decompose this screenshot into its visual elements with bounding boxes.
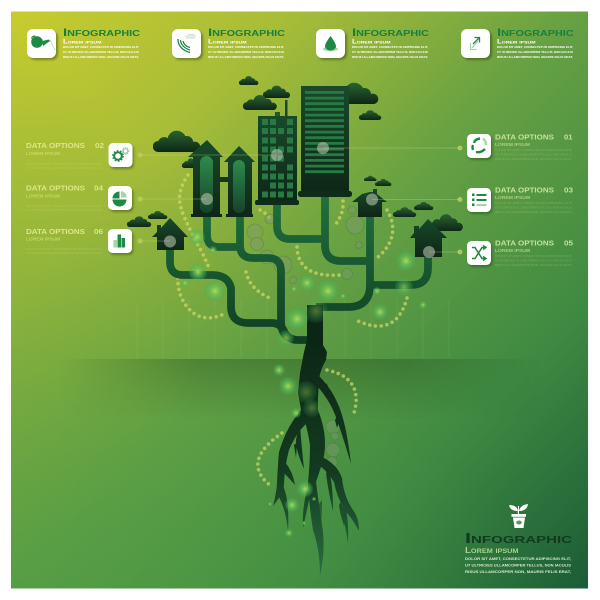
icon: shuffle arrows bbox=[472, 246, 486, 260]
data option 02: DOLOR SIT AMET, CONSECTETUR ADIPISCING ELIT, bbox=[26, 162, 102, 166]
body text: DOLOR SIT AMET, CONSECTETUR ADIPISCING ELIT, bbox=[208, 45, 284, 49]
body text: DOLOR SIT AMET, CONSECTETUR ADIPISCING ELIT, bbox=[352, 45, 428, 49]
data option 02: DATA OPTIONS bbox=[26, 141, 85, 150]
icon: recycle bbox=[472, 138, 486, 152]
data option 06: LOREM IPSUM bbox=[26, 236, 61, 242]
dotted circle arcs bbox=[178, 175, 407, 486]
body text: RISUS ULLAMCORPER NON, MAURIS FELIS ERAT, bbox=[497, 55, 573, 59]
data option 04: UT ULTRICIES ULLAMCORPER TELLUS, NON IACULIS bbox=[26, 208, 102, 212]
heading: Infographic bbox=[208, 27, 285, 39]
top block 3: water drop bbox=[316, 27, 429, 60]
body text: UT ULTRICIES ULLAMCORPER TELLUS, NON IACULIS bbox=[352, 50, 428, 54]
body text: UT ULTRICIES ULLAMCORPER TELLUS, NON IACULIS bbox=[63, 50, 139, 54]
body text: RISUS ULLAMCORPER NON, MAURIS FELIS ERAT, bbox=[352, 55, 428, 59]
top block 4: arrows bbox=[461, 27, 574, 60]
icon: pie chart bbox=[112, 191, 127, 207]
data option 02: LOREM IPSUM bbox=[26, 151, 61, 156]
body text: RISUS ULLAMCORPER NON, MAURIS FELIS ERAT, bbox=[465, 569, 571, 574]
data option 03: DOLOR SIT AMET, CONSECTETUR ADIPISCING ELIT, bbox=[495, 201, 572, 205]
icon: diagonal arrows bbox=[470, 38, 480, 50]
window building bbox=[255, 100, 299, 205]
body text: UT ULTRICIES ULLAMCORPER TELLUS, NON IACULIS bbox=[208, 50, 284, 54]
tower with arrow roof A bbox=[188, 140, 223, 217]
house left bbox=[152, 218, 188, 250]
body text: UT ULTRICIES ULLAMCORPER TELLUS, NON IACULIS bbox=[465, 562, 571, 568]
data option 05 bbox=[467, 238, 573, 267]
data option 04: DOLOR SIT AMET, CONSECTETUR ADIPISCING ELIT, bbox=[26, 204, 102, 208]
house right lower bbox=[410, 219, 447, 257]
heading: Infographic bbox=[63, 27, 140, 39]
data option 03: DATA OPTIONS bbox=[495, 186, 554, 194]
data option 06: DOLOR SIT AMET, CONSECTETUR ADIPISCING ELIT, bbox=[26, 247, 102, 251]
data option 02: 02 bbox=[95, 141, 104, 150]
icon: list bbox=[472, 194, 486, 206]
icon: potted plant bbox=[509, 504, 528, 528]
data option 06: DATA OPTIONS bbox=[26, 227, 85, 236]
clouds bbox=[127, 76, 463, 231]
data option 03: RISUS ULLAMCORPER NON, MAURIS FELIS ERAT, bbox=[495, 210, 572, 214]
data option 01 bbox=[467, 132, 572, 161]
icon: watering can bbox=[31, 36, 55, 50]
data option 03 bbox=[467, 186, 573, 214]
body text: RISUS ULLAMCORPER NON, MAURIS FELIS ERAT, bbox=[208, 55, 284, 59]
ground band bbox=[90, 300, 498, 404]
house right upper bbox=[352, 189, 387, 217]
heading: Infographic bbox=[497, 27, 574, 39]
striped office building bbox=[298, 86, 352, 197]
tree pipes bbox=[170, 195, 428, 340]
data option 01: UT ULTRICIES ULLAMCORPER TELLUS, NON IACULIS bbox=[495, 152, 572, 156]
leader lines and nodes bbox=[138, 142, 462, 258]
data option 04: 04 bbox=[94, 184, 104, 192]
subheading: Lorem ipsum bbox=[63, 40, 102, 46]
subheading: Lorem ipsum bbox=[497, 40, 536, 46]
data option 01: RISUS ULLAMCORPER NON, MAURIS FELIS ERAT, bbox=[495, 157, 572, 161]
body text: DOLOR SIT AMET, CONSECTETUR ADIPISCING ELIT, bbox=[63, 45, 139, 49]
tree roots bbox=[273, 305, 359, 576]
data option 06: UT ULTRICIES ULLAMCORPER TELLUS, NON IACULIS bbox=[26, 251, 102, 255]
translucent bubbles bbox=[247, 206, 364, 468]
top block 1: watering can bbox=[27, 27, 140, 60]
data option 03: 03 bbox=[564, 186, 573, 194]
data option 04: LOREM IPSUM bbox=[26, 194, 61, 198]
subheading: Lorem ipsum bbox=[465, 546, 518, 555]
data option 01: DATA OPTIONS bbox=[495, 132, 554, 142]
data option 05: RISUS ULLAMCORPER NON, MAURIS FELIS ERAT, bbox=[495, 263, 572, 267]
data option 02 bbox=[26, 141, 134, 170]
data option 06 bbox=[26, 227, 134, 255]
subheading: Lorem ipsum bbox=[208, 40, 247, 46]
data option 04 bbox=[26, 184, 134, 212]
data option 06: 06 bbox=[94, 227, 103, 236]
heading: Infographic bbox=[465, 531, 572, 547]
body text: UT ULTRICIES ULLAMCORPER TELLUS, NON IACULIS bbox=[497, 50, 573, 54]
data option 01: DOLOR SIT AMET, CONSECTETUR ADIPISCING ELIT, bbox=[495, 148, 572, 152]
body text: DOLOR SIT AMET, CONSECTETUR ADIPISCING ELIT, bbox=[465, 556, 571, 561]
data option 04: DATA OPTIONS bbox=[26, 184, 85, 192]
icon: signal arcs bbox=[178, 34, 196, 52]
heading: Infographic bbox=[352, 27, 429, 39]
data option 05: DOLOR SIT AMET, CONSECTETUR ADIPISCING ELIT, bbox=[495, 254, 572, 258]
data option 05: 05 bbox=[564, 238, 573, 248]
data option 01: LOREM IPSUM bbox=[495, 142, 531, 147]
data option 05: LOREM IPSUM bbox=[495, 248, 531, 253]
bottom block bbox=[465, 504, 572, 574]
icon: gears bbox=[113, 148, 129, 161]
top block 2: signal bbox=[172, 27, 285, 60]
data option 02: UT ULTRICIES ULLAMCORPER TELLUS, NON IACULIS bbox=[26, 166, 102, 170]
data option 03: UT ULTRICIES ULLAMCORPER TELLUS, NON IACULIS bbox=[495, 206, 572, 210]
tower with arrow roof B bbox=[220, 146, 255, 217]
subheading: Lorem ipsum bbox=[352, 40, 391, 46]
data option 01: 01 bbox=[564, 132, 572, 142]
icon: bar chart bbox=[114, 234, 125, 248]
data option 05: DATA OPTIONS bbox=[495, 238, 554, 248]
glowing orbs bbox=[181, 229, 427, 537]
icon: water drop bbox=[323, 36, 338, 51]
body text: RISUS ULLAMCORPER NON, MAURIS FELIS ERAT, bbox=[63, 55, 139, 59]
data option 03: LOREM IPSUM bbox=[495, 195, 531, 200]
data option 05: UT ULTRICIES ULLAMCORPER TELLUS, NON IACULIS bbox=[495, 258, 572, 262]
body text: DOLOR SIT AMET, CONSECTETUR ADIPISCING ELIT, bbox=[497, 45, 573, 49]
